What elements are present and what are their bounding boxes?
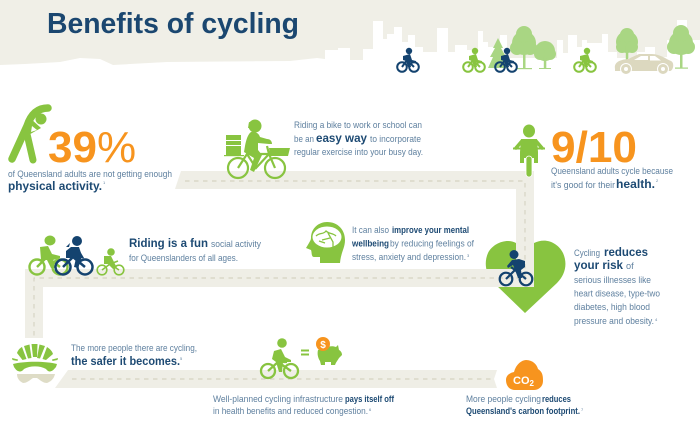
text: pays itself off: in health benefits and reduced congestion.: [213, 406, 368, 416]
text: reduces your risk: 4: [655, 317, 658, 322]
text: pays itself off: [213, 394, 395, 416]
text: reduces your risk: heart disease, type-two: [574, 288, 660, 298]
text: physical activity: [8, 169, 172, 193]
icon: green cyclist in skyline: [463, 48, 485, 72]
icon: CO2 cloud: 2: [530, 379, 534, 388]
text: mental wellbeing: stress, anxiety and depression.: [352, 252, 466, 262]
header skyline band: [0, 0, 700, 70]
text: reduces your risk: diabetes, high blood: [574, 302, 650, 312]
text: good for health: 2: [656, 178, 659, 183]
text: safer it becomes: the safer it becomes.: [71, 356, 180, 368]
text: mental wellbeing: by reducing feelings of: [390, 238, 474, 248]
text: mental wellbeing: improve your mental: [392, 225, 469, 235]
icon: family of cyclists: [30, 236, 124, 275]
title: Benefits of cycling: [47, 8, 299, 40]
text: physical activity: physical activity.: [8, 181, 102, 193]
text: physical activity: of Queensland adults are not getting enough: [8, 169, 172, 179]
text: reduces your risk: of: [626, 261, 634, 271]
text: mental wellbeing: [351, 225, 474, 262]
text: reduces your risk: your risk: [574, 258, 623, 272]
text: safer it becomes: The more people there are cycling,: [71, 343, 197, 353]
text: easy way: regular exercise into your busy day.: [294, 147, 423, 157]
text: reduces your risk: pressure and obesity.: [574, 316, 654, 326]
text: riding is a fun: [129, 236, 261, 263]
text: reduces your risk: [574, 245, 660, 326]
text: reduces your risk: Cycling: [574, 248, 600, 258]
text: easy way: Riding a bike to work or school can: [294, 120, 422, 130]
icon: piggy bank: [318, 345, 342, 365]
text: easy way: easy way: [316, 133, 368, 145]
text: pays itself off: pays itself off: [345, 394, 395, 404]
text: carbon footprint: [466, 394, 584, 416]
text: pays itself off: Well-planned cycling infrastructure: [213, 394, 343, 404]
heart: [486, 241, 565, 313]
icon: second green cyclist in skyline: [574, 48, 596, 72]
icon: brain in head: [306, 222, 345, 263]
text: good for health: [551, 166, 673, 191]
icon: navy cyclist beside green cyclist: [495, 48, 517, 72]
icon: car: [615, 54, 673, 74]
stat: 39%: 39%: [48, 123, 136, 172]
equals sign: [301, 350, 309, 356]
icon: navy cyclist on heart: [500, 250, 532, 285]
text: carbon footprint: 7: [581, 407, 584, 412]
icon: delivery cyclist: [224, 120, 290, 178]
text: mental wellbeing: wellbeing: [351, 238, 389, 248]
icon: cycling helmet and glasses: [12, 344, 58, 383]
text: riding is a fun: social activity: [211, 239, 261, 249]
text: riding is a fun: for Queenslanders of all ages.: [129, 253, 238, 263]
icon: front-view cyclist: [513, 124, 545, 177]
icon: navy cyclist in skyline: [397, 48, 419, 72]
text: easy way: [294, 120, 423, 157]
icon: CO2 cloud: CO: [513, 375, 530, 387]
text: easy way: to incorporate: [370, 134, 421, 144]
text: pays itself off: 6: [369, 407, 372, 412]
text: easy way: be an: [294, 134, 314, 144]
text: good for health: Queensland adults cycle because: [551, 166, 673, 176]
text: reduces your risk: reduces: [604, 245, 648, 259]
stat: 9/10: 9/10: [551, 123, 637, 172]
text: riding is a fun: Riding is a fun: [129, 236, 208, 250]
text: good for health: it's good for their: [551, 180, 615, 190]
text: reduces your risk: serious illnesses like: [574, 275, 651, 285]
text: safer it becomes: [71, 343, 197, 368]
icon: stretching person: [12, 108, 48, 160]
text: carbon footprint: More people cycling: [466, 394, 541, 404]
text: carbon footprint: reduces: [542, 394, 571, 404]
text: physical activity: 1: [103, 180, 106, 185]
icon: CO2 cloud: [506, 360, 543, 390]
icon: cyclist equals savings: [261, 337, 342, 378]
skyline trees: [488, 25, 695, 69]
text: carbon footprint: Queensland's carbon footprint.: [466, 406, 580, 416]
winding road: [25, 171, 534, 388]
text: mental wellbeing: 3: [467, 253, 470, 258]
text: safer it becomes: 5: [180, 356, 183, 361]
icon: dollar coin: $: [320, 340, 326, 351]
text: mental wellbeing: It can also: [352, 225, 389, 235]
text: good for health: health.: [616, 179, 655, 191]
